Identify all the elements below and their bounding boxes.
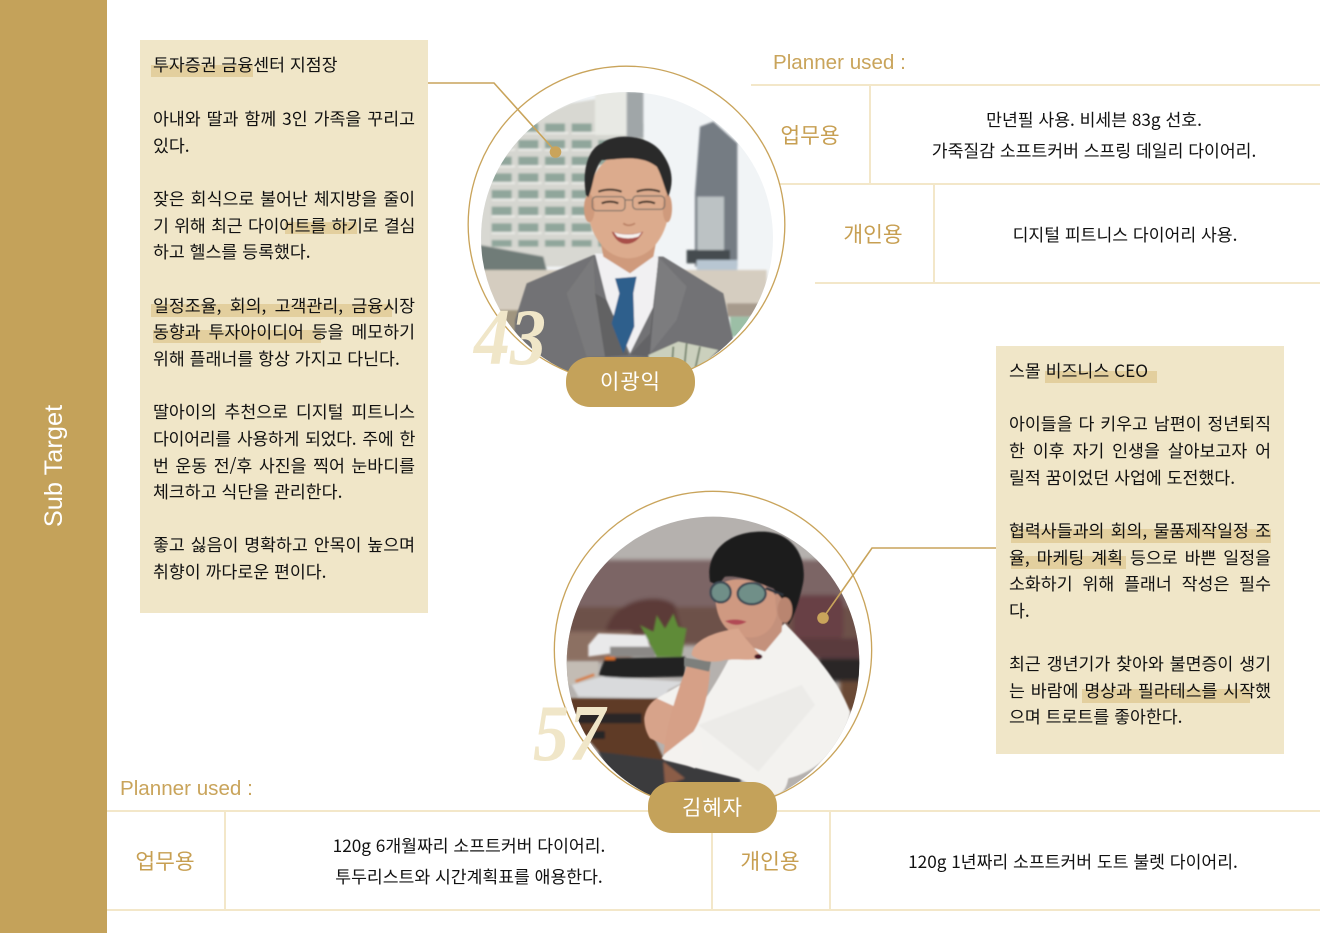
text: planner line 3: 위해 플래너를 항상 가지고 다닌다. <box>153 345 400 370</box>
ring <box>554 491 872 809</box>
text: story line 3: 릴적 꿈이었던 사업에 도전했다. <box>1009 464 1235 489</box>
name pill: 이광익: 이광익 <box>600 366 661 396</box>
bottom planner table <box>107 777 1320 911</box>
sidebar title: Sub Target: Sub Target <box>40 405 68 527</box>
text: personal planner: 120g 1년짜리 소프트커버 도트 불렛 다이어리. <box>908 848 1238 873</box>
text: planner line 1: 일정조율, 회의, 고객관리, 금융시장 <box>153 292 415 317</box>
text: health line 2: 는 바람에 명상과 필라테스를 시작했 <box>1009 677 1271 702</box>
ring <box>468 66 785 383</box>
text: planner line 2: 동향과 투자아이디어 등을 메모하기 <box>153 318 415 343</box>
connector: persona 1 <box>428 83 561 158</box>
top planner table <box>751 51 1320 284</box>
text: job title: 투자증권 금융센터 지점장 <box>153 51 338 76</box>
name pill: 이광익 <box>566 357 695 407</box>
text: family line 2: 있다. <box>153 132 190 157</box>
text: planner line 1: 협력사들과의 회의, 물품제작일정 조 <box>1009 517 1271 542</box>
text: digital line 3: 번 운동 전/후 사진을 찍어 눈바디를 <box>153 452 415 477</box>
text: taste line 1: 좋고 싫음이 명확하고 안목이 높으며 <box>153 531 415 556</box>
highlight: pilates <box>1082 689 1250 703</box>
highlight: job title <box>151 65 253 77</box>
text: job title: 스몰 비즈니스 CEO <box>1009 357 1148 382</box>
highlight: ideas <box>153 330 321 343</box>
label: work use: 업무용 <box>780 119 840 150</box>
text: digital line 2: 다이어리를 사용하게 되었다. 주에 한 <box>153 425 415 450</box>
text: personal planner: 디지털 피트니스 다이어리 사용. <box>1013 221 1237 246</box>
heading: Planner used: Planner used : <box>120 777 253 800</box>
text: story line 2: 한 이후 자기 인생을 살아보고자 어 <box>1009 437 1271 462</box>
panel: persona 2 description <box>996 346 1284 754</box>
label: personal use: 개인용 <box>843 218 903 249</box>
text: planner line 4: 다. <box>1009 597 1030 622</box>
text: health line 3: 으며 트로트를 좋아한다. <box>1009 703 1182 728</box>
portraits and connectors <box>428 66 996 797</box>
name pill: 김혜자: 김혜자 <box>682 792 743 822</box>
name pill: 김혜자 <box>648 782 777 833</box>
text: work planner line 1: 만년필 사용. 비세븐 83g 선호. <box>986 106 1202 131</box>
heading: Planner used: Planner used : <box>773 51 906 74</box>
panel: persona 1 description <box>140 40 428 613</box>
highlight: schedule <box>151 304 392 317</box>
text: taste line 2: 취향이 까다로운 편이다. <box>153 558 326 583</box>
text: family line 1: 아내와 딸과 함께 3인 가족을 꾸리고 <box>153 105 415 130</box>
text: work planner line 2: 가죽질감 소프트커버 스프링 데일리 다이어리. <box>932 137 1256 162</box>
photo: businesswoman <box>554 490 872 797</box>
text: work planner line 1: 120g 6개월짜리 소프트커버 다이어리. <box>333 832 605 857</box>
highlight: marketing <box>1011 556 1126 569</box>
highlight: CEO <box>1045 371 1157 383</box>
text: digital line 1: 딸아이의 추천으로 디지털 피트니스 <box>153 398 415 423</box>
connector: persona 2 <box>817 548 996 624</box>
age number: 57: 57 <box>533 690 608 778</box>
text: diet line 3: 하고 헬스를 등록했다. <box>153 238 311 263</box>
highlight: meetings <box>1011 529 1271 543</box>
photo: businessman <box>468 66 786 372</box>
text: health line 1: 최근 갱년기가 찾아와 불면증이 생기 <box>1009 650 1271 675</box>
text: planner line 3: 소화하기 위해 플래너 작성은 필수 <box>1009 570 1271 595</box>
text: work planner line 2: 투두리스트와 시간계획표를 애용한다. <box>335 863 603 888</box>
label: work use: 업무용 <box>135 845 195 876</box>
age number: 43: 43 <box>472 294 546 382</box>
highlight: diet <box>285 222 357 234</box>
text: digital line 4: 체크하고 식단을 관리한다. <box>153 478 342 503</box>
text: diet line 2: 기 위해 최근 다이어트를 하기로 결심 <box>153 212 415 237</box>
text: story line 1: 아이들을 다 키우고 남편이 정년퇴직 <box>1009 410 1271 435</box>
label: personal use: 개인용 <box>740 845 800 876</box>
sidebar <box>0 0 107 933</box>
text: diet line 1: 잦은 회식으로 불어난 체지방을 줄이 <box>153 185 415 210</box>
text: planner line 2: 율, 마케팅 계획 등으로 바쁜 일정을 <box>1009 544 1271 569</box>
